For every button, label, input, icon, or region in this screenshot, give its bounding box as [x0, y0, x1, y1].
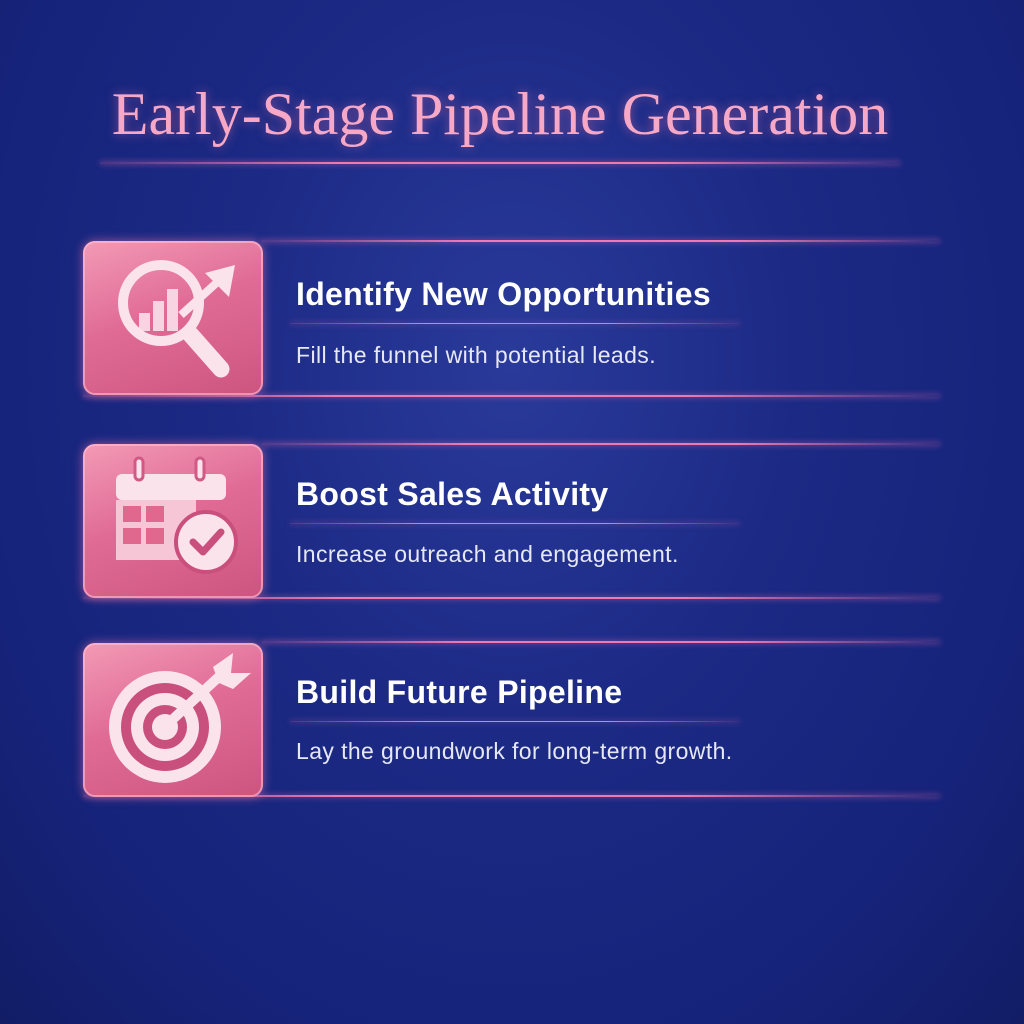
heading 2: Boost Sales Activity	[296, 476, 608, 512]
heading 1: Identify New Opportunities	[296, 276, 711, 312]
text 2: Increase outreach and engagement.	[296, 541, 679, 567]
title: Early-Stage Pipeline Generation	[112, 81, 888, 147]
heading 3: Build Future Pipeline	[296, 674, 622, 710]
item 2	[81, 439, 942, 603]
text 1: Fill the funnel with potential leads.	[296, 342, 656, 368]
item 1	[81, 236, 942, 401]
icon: calendar check	[83, 444, 263, 598]
icon: target	[83, 643, 263, 797]
item 3	[80, 637, 942, 801]
text 3: Lay the groundwork for long-term growth.	[296, 738, 733, 764]
icon: magnifier chart	[83, 241, 263, 395]
